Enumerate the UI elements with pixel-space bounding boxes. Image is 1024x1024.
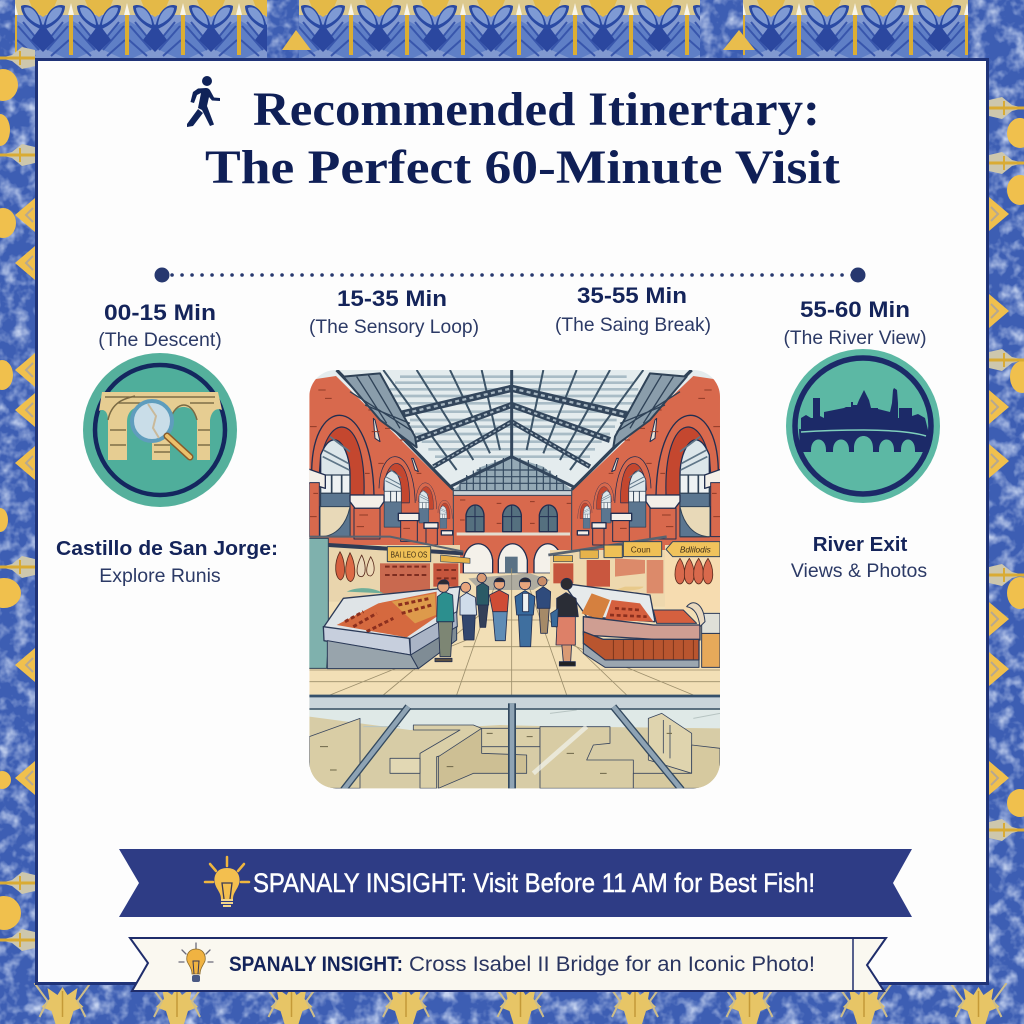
icon: walking person xyxy=(187,76,220,127)
shopper: woman in salmon skirt xyxy=(551,578,578,666)
step label: 00-15 Min xyxy=(98,300,222,351)
step label: 55-60 Min xyxy=(784,297,926,349)
archaeological floor window xyxy=(309,695,720,790)
display case xyxy=(324,586,460,638)
roof skylight xyxy=(316,370,713,491)
left stall xyxy=(308,537,470,669)
banner: cross Isabel II bridge: Cross Isabel II Bridge for an Iconic Photo! xyxy=(409,952,815,976)
timeline xyxy=(154,268,866,282)
banner: cross Isabel II bridge xyxy=(130,938,886,991)
end wall windows xyxy=(466,505,557,532)
right side motifs xyxy=(989,118,1024,817)
step label: 55-60 Min: 55-60 Min xyxy=(800,297,910,322)
shopper: teal sweater xyxy=(435,580,454,662)
brick walls xyxy=(309,376,453,573)
shopper: dark coat xyxy=(477,573,489,627)
step label: 35-55 Min: (The Saing Break) xyxy=(555,314,711,336)
shopper: navy jacket xyxy=(536,577,551,633)
left wall arcade xyxy=(307,373,453,545)
shopper: red top xyxy=(489,578,509,641)
title: The Perfect 60-Minute Visit xyxy=(205,141,840,194)
stop caption: River Exit xyxy=(791,533,927,582)
step label: 35-55 Min: 35-55 Min xyxy=(577,283,687,308)
right stall xyxy=(548,537,720,667)
left stall: BAI LEO OS xyxy=(391,551,427,560)
crowd background xyxy=(468,573,550,590)
banner: cross Isabel II bridge: SPANALY INSIGHT: xyxy=(229,953,403,976)
step label: 00-15 Min: 00-15 Min xyxy=(104,300,216,325)
stop caption: Castillo de San Jorge xyxy=(56,537,278,587)
left side motifs xyxy=(0,69,35,930)
shopper: white shirt xyxy=(460,582,477,640)
shopper: blue jacket xyxy=(515,578,535,647)
icon: river skyline with bridge xyxy=(786,349,940,503)
icon: aqueduct ruins with magnifying glass xyxy=(83,353,237,507)
display case xyxy=(563,583,655,622)
step label: 15-35 Min: 15-35 Min xyxy=(337,286,447,311)
step label: 35-55 Min xyxy=(555,283,711,336)
title: Recommended Itinertary: xyxy=(253,83,820,136)
icon: light bulb xyxy=(179,943,213,982)
stop caption: River Exit: Views & Photos xyxy=(791,560,927,582)
stop caption: River Exit: River Exit xyxy=(813,533,907,556)
icon: light bulb xyxy=(205,857,249,906)
market hall illustration xyxy=(307,370,723,790)
stop caption: Castillo de San Jorge: Castillo de San Jorge: xyxy=(56,537,278,560)
floor xyxy=(309,573,720,695)
step label: 00-15 Min: (The Descent) xyxy=(98,329,222,351)
title xyxy=(205,83,840,194)
banner: visit before 11 AM xyxy=(119,849,912,917)
step label: 55-60 Min: (The River View) xyxy=(784,327,926,349)
step label: 15-35 Min xyxy=(309,286,479,338)
lower arches xyxy=(463,544,562,573)
right wall arcade xyxy=(577,373,723,545)
hams xyxy=(336,552,374,582)
stop caption: Castillo de San Jorge: Explore Runis xyxy=(99,565,221,587)
railing xyxy=(310,697,720,708)
right stall: Coun xyxy=(631,545,651,555)
banner: visit before 11 AM: SPANALY INSIGHT: Visit Before 11 AM for Best Fish! xyxy=(253,868,815,898)
step label: 15-35 Min: (The Sensory Loop) xyxy=(309,316,479,338)
right stall: Bdlilodis xyxy=(680,544,711,554)
